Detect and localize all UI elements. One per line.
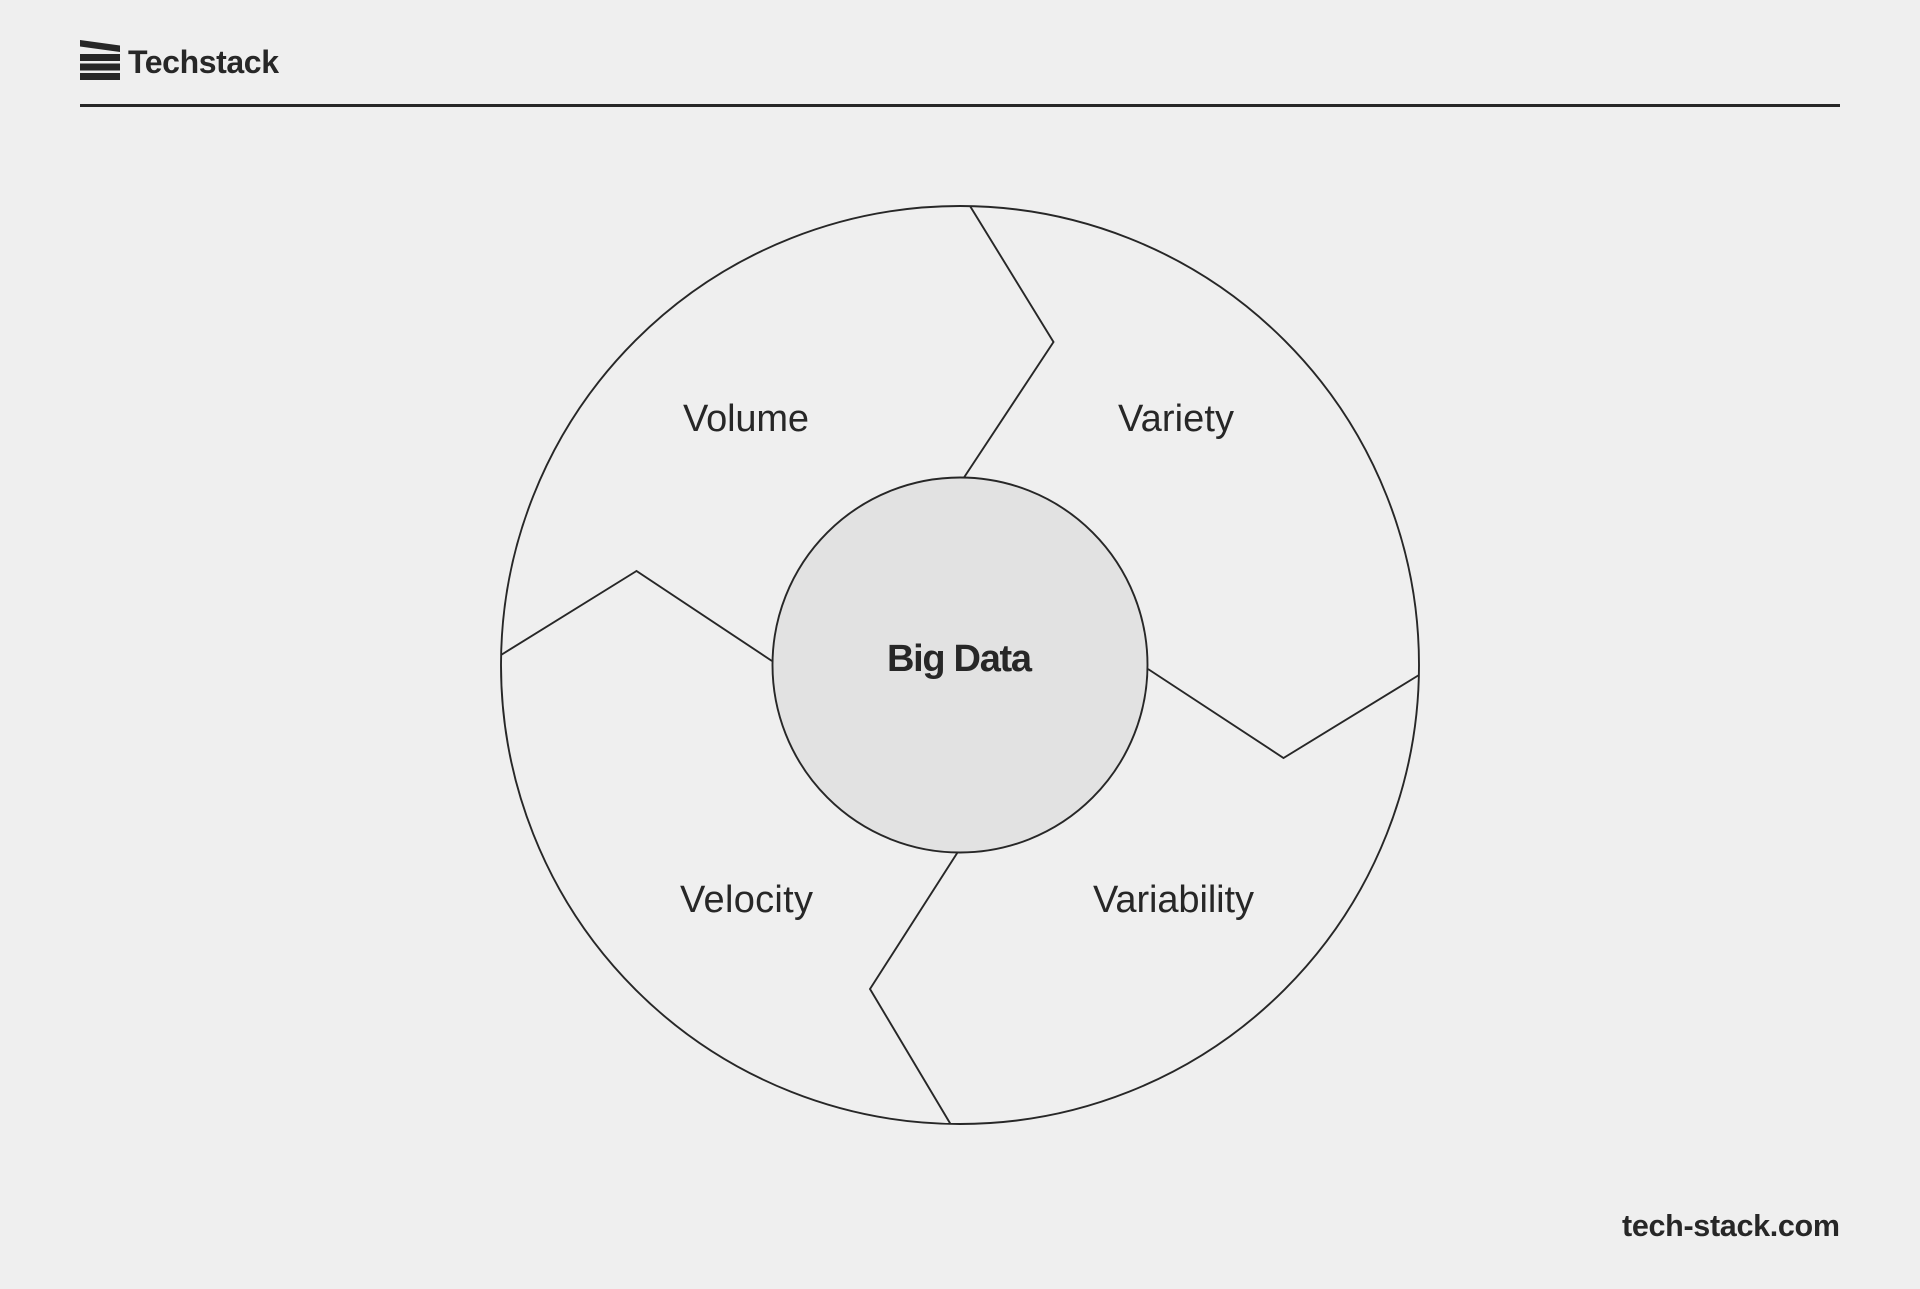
outer circle: [501, 206, 1419, 1124]
brand name: Techstack: [128, 44, 279, 80]
label: variety: Variety: [1118, 398, 1234, 440]
divider: variety and variability: [1148, 669, 1419, 758]
label: variability: Variability: [1093, 879, 1254, 921]
divider: variability and velocity: [870, 852, 958, 1124]
header logo: [80, 40, 279, 80]
label: velocity: Velocity: [680, 879, 813, 921]
icon: stacked bars logo: [80, 40, 120, 80]
divider: volume and variety: [964, 206, 1054, 478]
center circle: [772, 478, 1148, 852]
center label: Big Data: [887, 638, 1033, 680]
label: volume: Volume: [683, 398, 809, 440]
cycle diagram: [501, 206, 1419, 1124]
divider: velocity and volume: [501, 571, 772, 661]
footer url: tech-stack.com: [1622, 1209, 1840, 1243]
